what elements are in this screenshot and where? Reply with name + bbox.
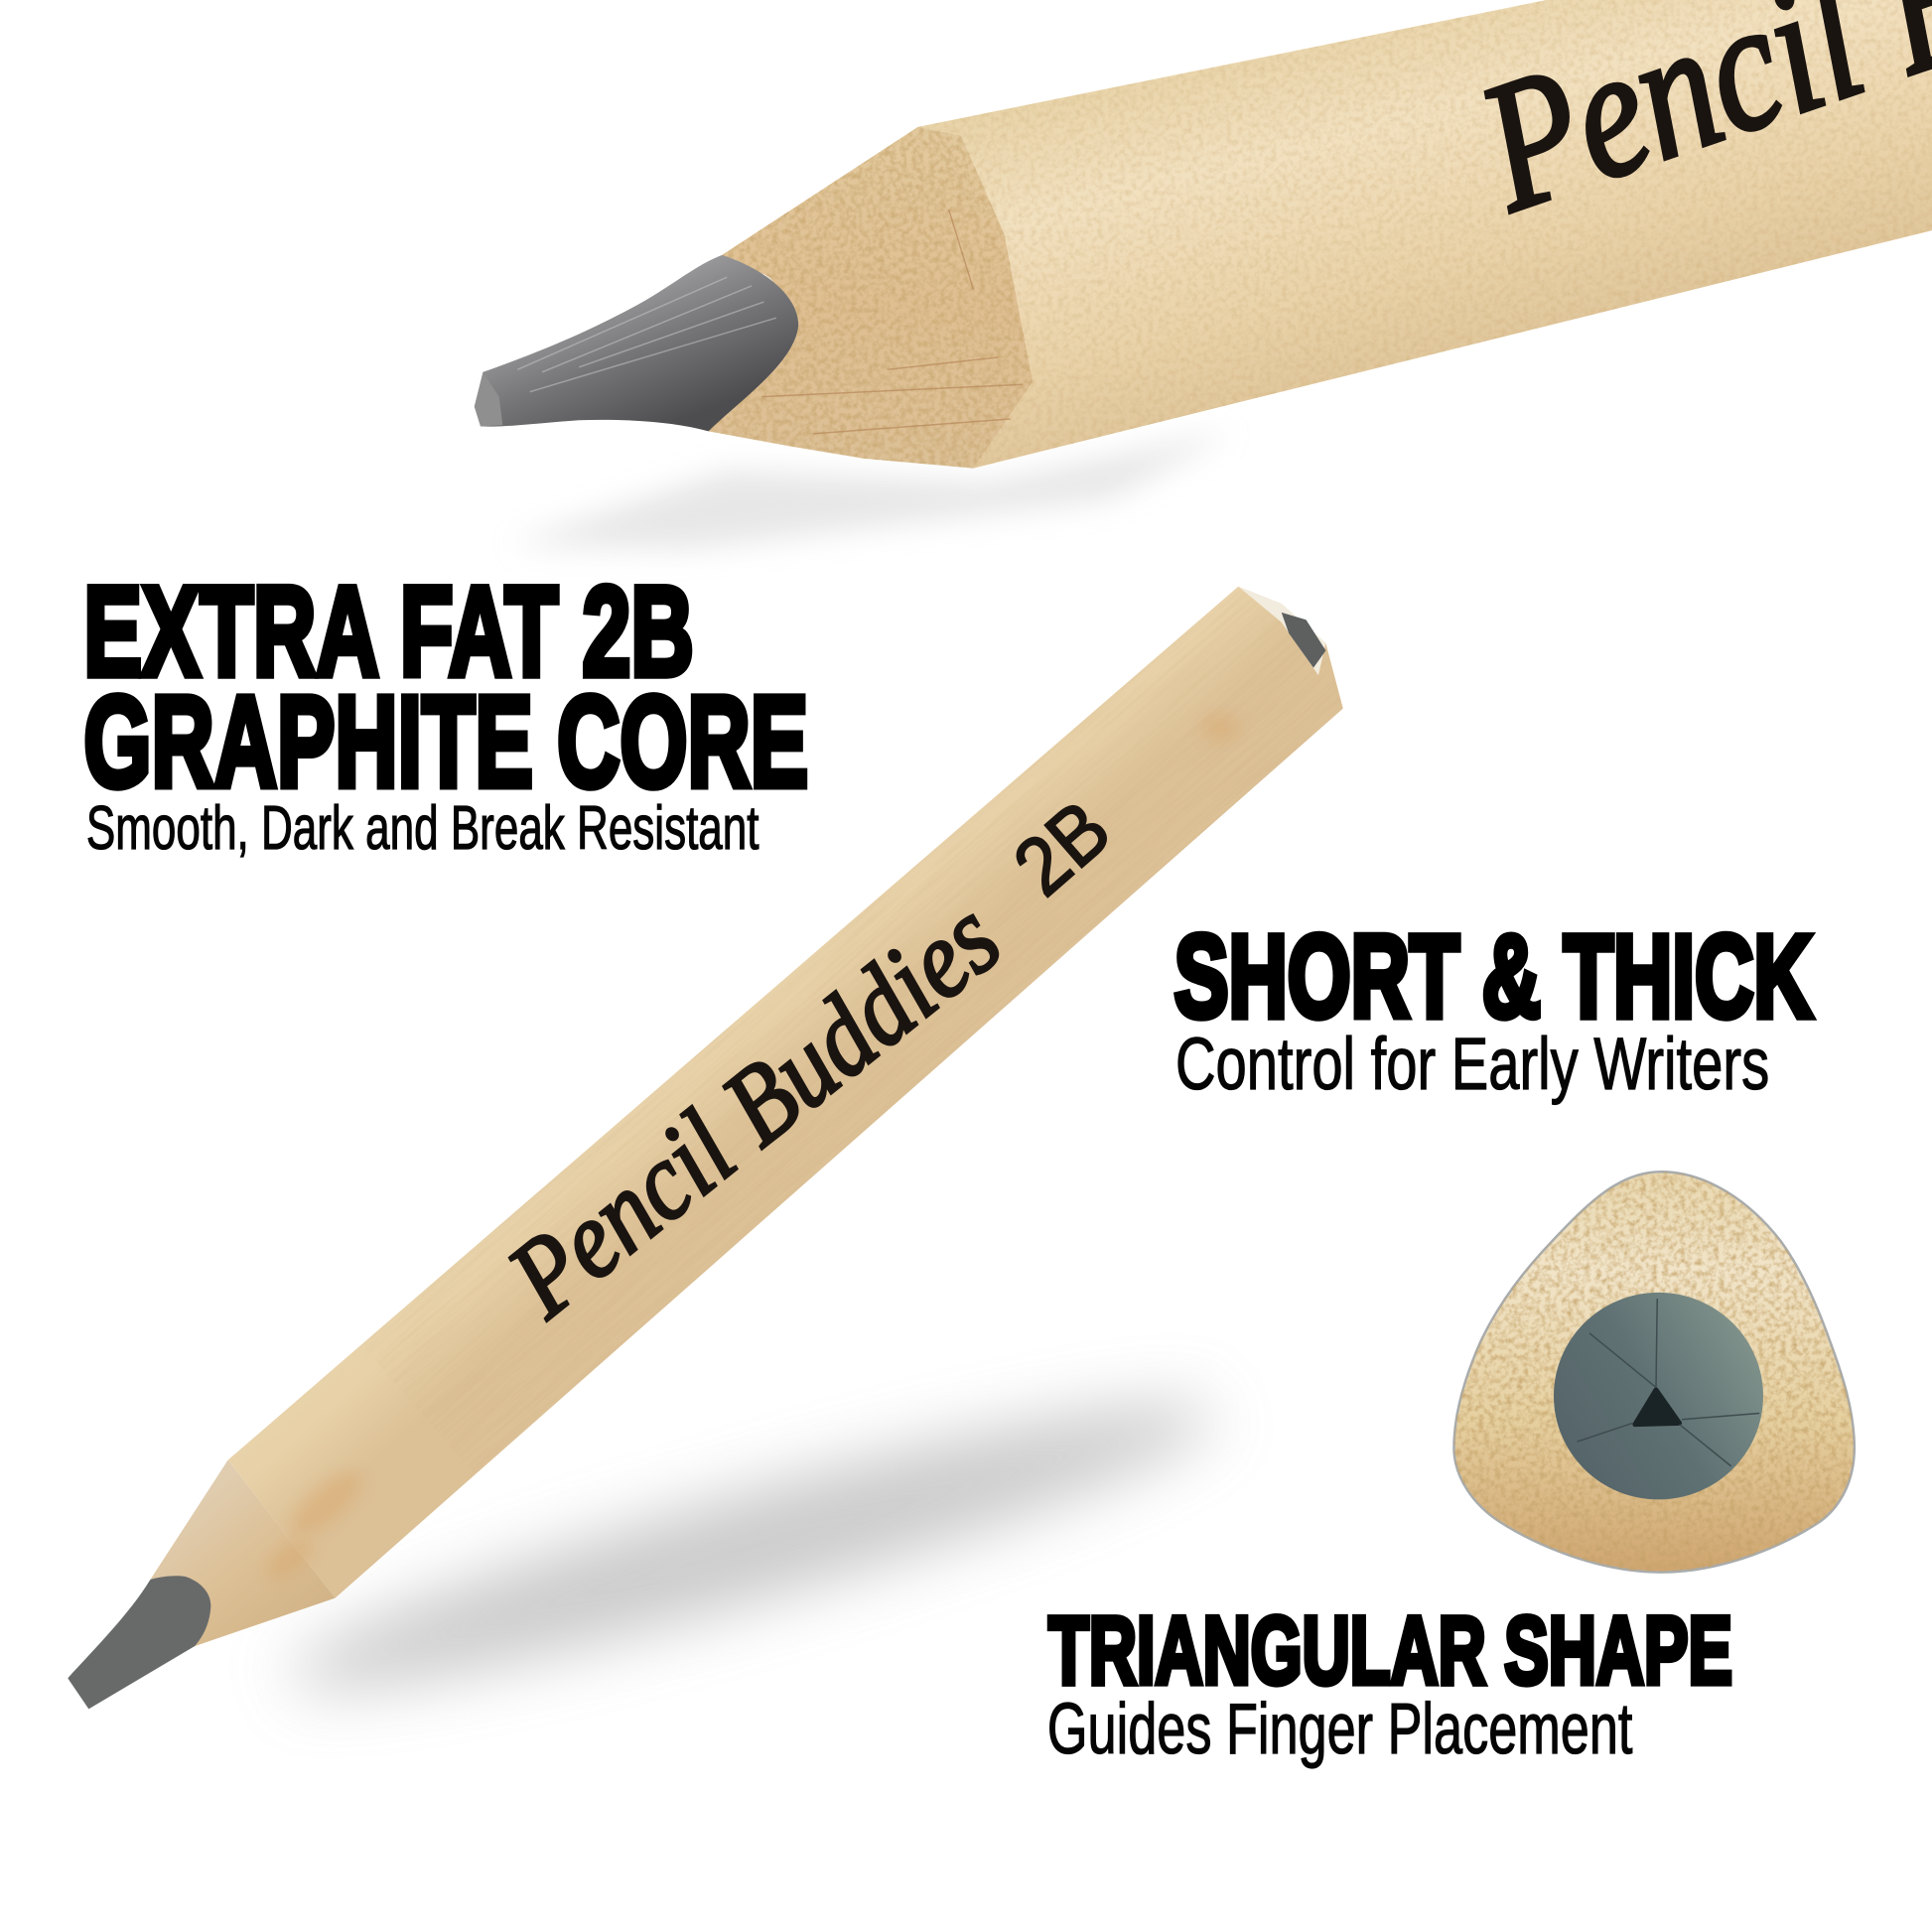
sharpened wood cone [709,127,1033,469]
subtext: guides finger placement: Guides Finger Placement [1047,1690,1632,1769]
pencil wood body [228,587,1343,1598]
subtext: smooth dark: Smooth, Dark and Break Resistant [86,794,759,863]
wood grain texture [690,0,1932,481]
graphite core circle [1554,1293,1763,1499]
lead flat tip [475,372,502,426]
pencil lower sharpened section [150,1460,336,1646]
wood grain texture [360,292,1682,1472]
rounded triangle wood [1453,1172,1855,1573]
graphite tip [68,1576,210,1709]
core triangle centre [1635,1390,1680,1425]
cone grain lines [761,209,1023,434]
wood body [918,0,1932,469]
large pencil tip close-up [475,0,1932,481]
heading: extra fat 2B graphite core [83,561,808,814]
shadow of small pencil [275,1362,1228,1730]
heading: extra fat 2B graphite core: EXTRA FAT 2B [83,561,694,703]
pencil brand text: Pencil Buddies [484,876,1023,1340]
wood texture [1451,1169,1859,1575]
heading: extra fat 2B graphite core: GRAPHITE CORE [83,669,808,814]
cross-section icon: triangular shape [1451,1169,1859,1575]
core fracture lines [1578,1299,1759,1466]
2B grade text: 2B [998,783,1127,913]
orange wood stains [261,715,1237,1586]
shadow of large pencil [511,431,1232,548]
cone wood texture [702,123,1047,475]
back end white cut [1238,587,1325,675]
small whole pencil [68,586,1841,1710]
graphite lead [475,255,798,431]
back end graphite [1282,613,1325,668]
lead streaks [517,277,776,392]
